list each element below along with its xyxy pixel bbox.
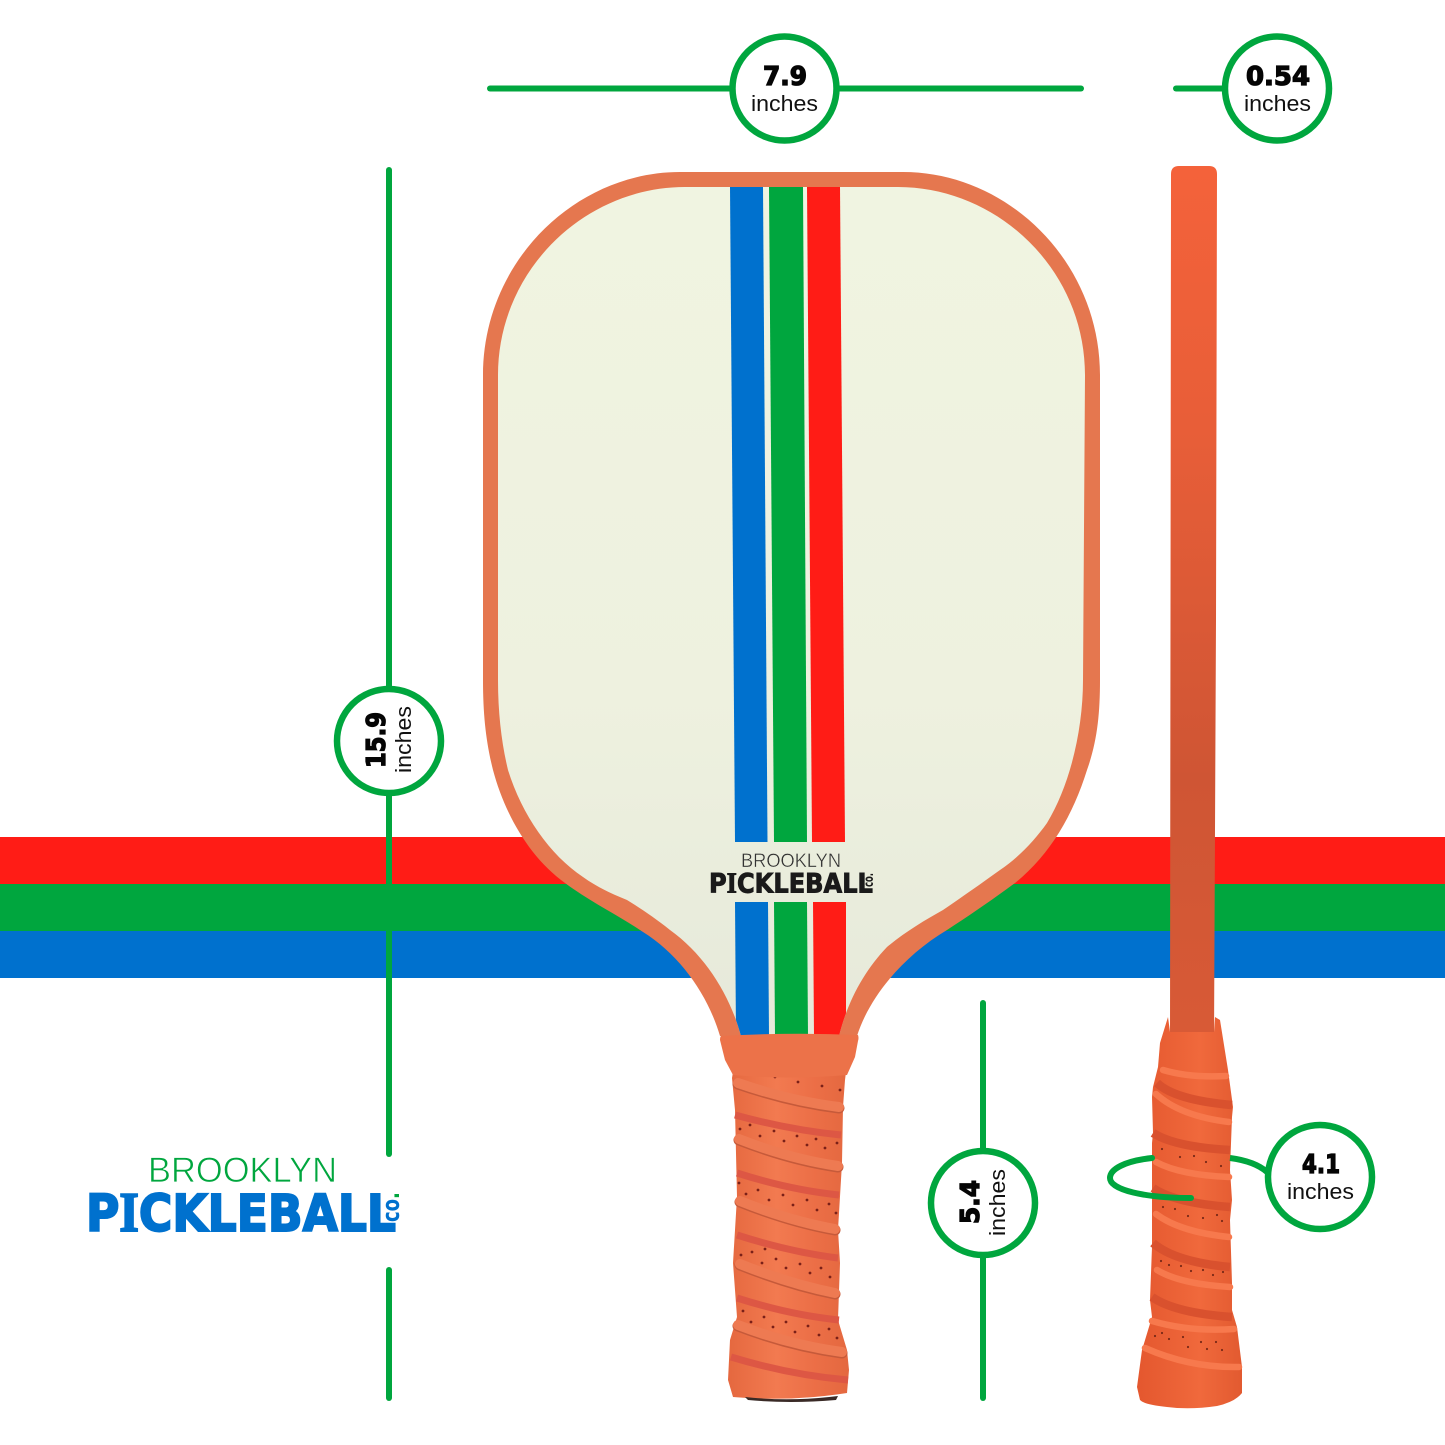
callout: handle length 5.4 inches [931,1151,1035,1255]
side grip [1137,1017,1242,1408]
callout: width 7.9 inches: inches [751,91,818,116]
handle collar [720,1034,858,1078]
paddle logo [709,851,877,899]
callout: height 15.9 inches: 15.9 [362,712,392,768]
brand logo: PICKLEBALL [86,1183,396,1244]
grip dark bands [731,1115,848,1380]
grip perforations [738,1076,841,1339]
callout: width 7.9 inches: 7.9 [763,62,807,92]
paddle stripes [730,187,846,1036]
brand logo: BROOKLYN [148,1151,337,1190]
dimension line: paddle thickness [1176,86,1226,92]
callout: width 7.9 inches [732,36,836,140]
dimension line: handle length [980,1003,986,1398]
dimension line: paddle width [490,86,1081,92]
paddle face [498,187,1085,1036]
callout: thickness 0.54 inches [1225,36,1329,140]
background tricolour bands [0,837,1445,978]
circumference ring around grip [1110,1158,1267,1198]
paddle logo: PICKLEBALL [709,866,873,899]
callout: grip circumference 4.1 inches: inches [1287,1179,1354,1204]
paddle side view [1137,166,1242,1408]
side grip light ridges [1145,1070,1239,1367]
paddle frame [483,172,1100,1036]
dimension line: paddle height [386,170,392,1398]
callout: grip circumference 4.1 inches: 4.1 [1302,1150,1340,1180]
brand logo [86,1151,406,1244]
grip raised ridges [738,1083,842,1353]
brand logo: co. [378,1192,406,1222]
callout: handle length 5.4 inches: 5.4 [956,1180,986,1224]
paddle logo: BROOKLYN [741,851,841,872]
callout: handle length 5.4 inches: inches [985,1169,1010,1236]
side grip perforations [1154,1148,1224,1351]
paddle logo: co. [861,873,877,887]
callout: height 15.9 inches [337,689,441,793]
paddle front view [483,172,1100,1402]
side grip dark bands [1152,1083,1232,1317]
callout: thickness 0.54 inches: 0.54 [1246,62,1310,92]
callout: thickness 0.54 inches: inches [1244,91,1311,116]
handle grip [720,1034,858,1402]
side shaft [1170,166,1217,1040]
callout: grip circumference 4.1 inches [1268,1125,1372,1229]
callout: height 15.9 inches: inches [391,706,416,773]
